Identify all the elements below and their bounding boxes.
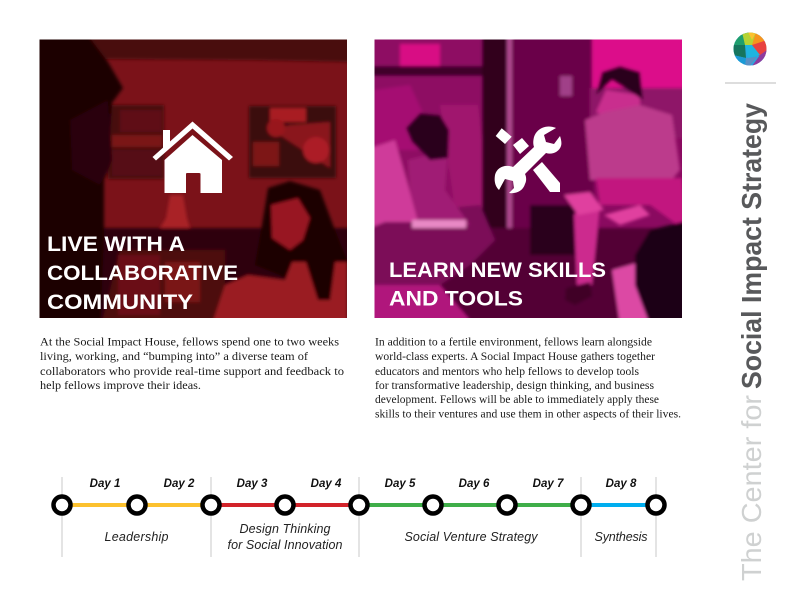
text block: live with a collaborative community description: help fellows improve their ideas. (40, 379, 201, 392)
phase labels (104, 522, 648, 552)
day labels (90, 478, 637, 490)
heading: learn new skills and tools: AND TOOLS (389, 286, 523, 310)
phase labels: Social Venture Strategy (404, 530, 538, 544)
icon: wrench and screwdriver (495, 126, 561, 193)
vertical title: The Center for Social Impact Strategy: The Center for (736, 395, 767, 581)
photo: magenta duotone workshop (374, 40, 682, 318)
heading: live with a collaborative community: COMMUNITY (47, 290, 193, 314)
timeline: eight day programme (54, 477, 664, 557)
text block: live with a collaborative community description: collaborators who provide real-time support and feedback to (40, 365, 344, 378)
phase labels: Leadership (104, 530, 169, 544)
heading: live with a collaborative community: LIVE WITH A (47, 232, 185, 256)
vertical title: The Center for Social Impact Strategy: Social Impact Strategy (736, 103, 767, 389)
text block: learn new skills and tools description: skills to their ventures and use them in other aspects of their lives. (375, 408, 681, 420)
text block: learn new skills and tools description: development. Fellows will be able to immediately apply these (375, 393, 659, 406)
divider under logo (725, 82, 776, 84)
day labels: Day 3 (237, 478, 268, 490)
day labels: Day 6 (459, 478, 490, 490)
phase labels: Design Thinking (240, 522, 331, 536)
logo: faceted colour sphere (733, 32, 767, 66)
heading: live with a collaborative community: COLLABORATIVE (47, 261, 238, 285)
day labels: Day 1 (90, 478, 120, 490)
text block: learn new skills and tools description: for transformative leadership, design thinking, and business (375, 379, 654, 392)
text block: learn new skills and tools description (375, 336, 681, 420)
day labels: Day 2 (164, 478, 195, 490)
icon: house (152, 122, 233, 193)
day labels: Day 8 (606, 478, 637, 490)
text block: learn new skills and tools description: educators and mentors who help fellows to develop tools (375, 365, 639, 378)
text block: live with a collaborative community description: living, working, and “bumping into” a diverse team of (40, 350, 308, 363)
phase labels: Synthesis (594, 530, 648, 544)
day labels: Day 5 (385, 478, 416, 490)
text block: live with a collaborative community description: At the Social Impact House, fellows spend one to two weeks (40, 336, 340, 348)
heading: learn new skills and tools: LEARN NEW SKILLS (389, 258, 606, 282)
heading: live with a collaborative community (47, 232, 238, 314)
text block: live with a collaborative community description (40, 336, 344, 392)
day labels: Day 7 (533, 478, 564, 490)
text block: learn new skills and tools description: In addition to a fertile environment, fellows learn alongside (375, 336, 652, 348)
text block: learn new skills and tools description: world-class experts. A Social Impact House gathers together (375, 350, 655, 363)
day labels: Day 4 (311, 478, 342, 490)
heading: learn new skills and tools (389, 258, 606, 310)
panel: live with a collaborative community (40, 40, 347, 318)
panel: learn new skills and tools (374, 40, 682, 318)
phase labels: for Social Innovation (228, 538, 343, 552)
photo: red duotone living room (40, 40, 347, 318)
vertical title: The Center for Social Impact Strategy (736, 103, 767, 581)
